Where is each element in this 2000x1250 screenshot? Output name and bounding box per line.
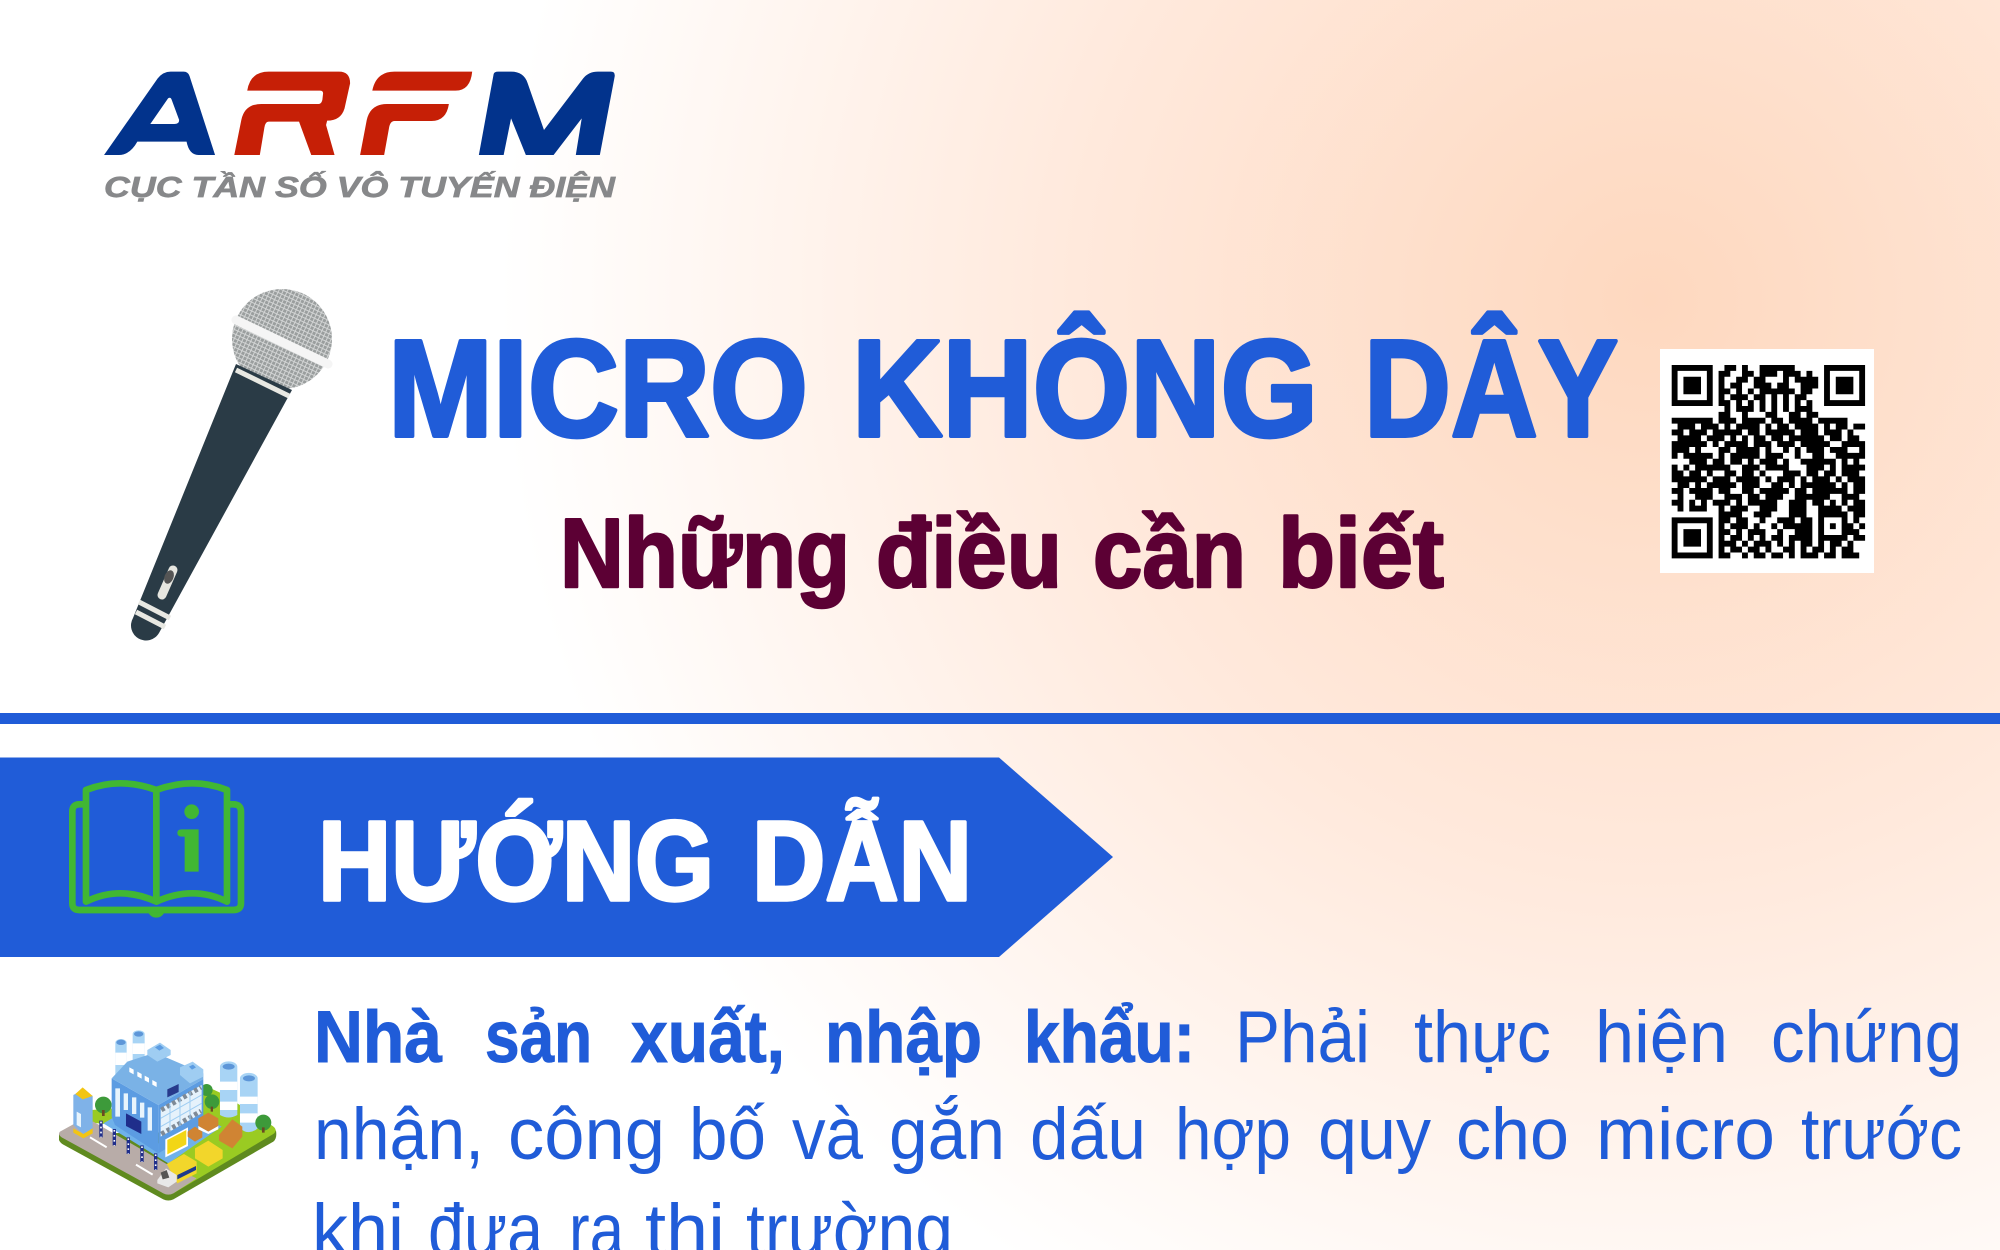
trees [95,1084,271,1133]
subtitle [560,498,1444,608]
logo letters [104,72,615,155]
second line [314,1094,1962,1175]
second line: nhận, [314,1094,484,1175]
second line: dấu [1030,1094,1146,1175]
banner arrow shape [0,758,1113,957]
subtitle: Những [560,498,850,608]
bold lead-in: xuất, [631,997,785,1078]
banner heading [318,798,972,924]
icon: microphone [131,289,332,640]
clock tower [73,1087,93,1138]
logo: ARFM [104,72,616,204]
title: MICRO [388,312,808,466]
bold lead-in: khẩu: [1024,997,1195,1078]
second line: công [508,1094,665,1175]
first line regular: Phải [1235,997,1370,1078]
bold lead-in: Nhà [314,997,442,1078]
second line: micro [1596,1094,1775,1175]
subtitle: cần [1093,498,1246,608]
first line regular [1235,997,1962,1078]
building [112,1043,203,1153]
title [388,312,1618,466]
bold lead-in: sản [485,997,592,1078]
bold lead-in: nhập [825,997,982,1078]
banner heading: HƯỚNG [318,798,714,924]
icon: open book with info mark [72,783,241,918]
back chimneys [115,1030,145,1075]
second line: gắn [889,1094,1005,1175]
second line: và [792,1094,863,1175]
logo tagline: CỤC TẦN SỐ VÔ TUYẾN ĐIỆN [104,170,616,204]
title: KHÔNG [852,312,1318,466]
body text: manufacturers and importers [312,997,1962,1250]
title: DÂY [1364,312,1618,466]
first line regular: chứng [1771,997,1962,1078]
banner heading: DẪN [752,798,972,924]
second line: quy [1318,1094,1431,1175]
second line: bố [689,1094,766,1175]
subtitle: biết [1278,498,1444,608]
billboard [165,1127,188,1157]
second line: cho [1456,1094,1569,1175]
third line [312,1190,953,1250]
bollards and fences [90,1121,157,1175]
front silos [220,1061,258,1132]
section banner: HƯỚNG DẪN [0,758,1113,957]
second line: trước [1801,1094,1962,1175]
truck [157,1154,197,1187]
first line regular: thực [1414,997,1551,1078]
crates [188,1113,242,1167]
icon: factory [59,1030,276,1200]
first line regular: hiện [1595,997,1728,1078]
subtitle: điều [876,498,1062,608]
QR code [1660,349,1874,573]
bold lead-in [314,997,1195,1078]
factory ground [59,1085,276,1200]
second line: hợp [1175,1094,1291,1175]
